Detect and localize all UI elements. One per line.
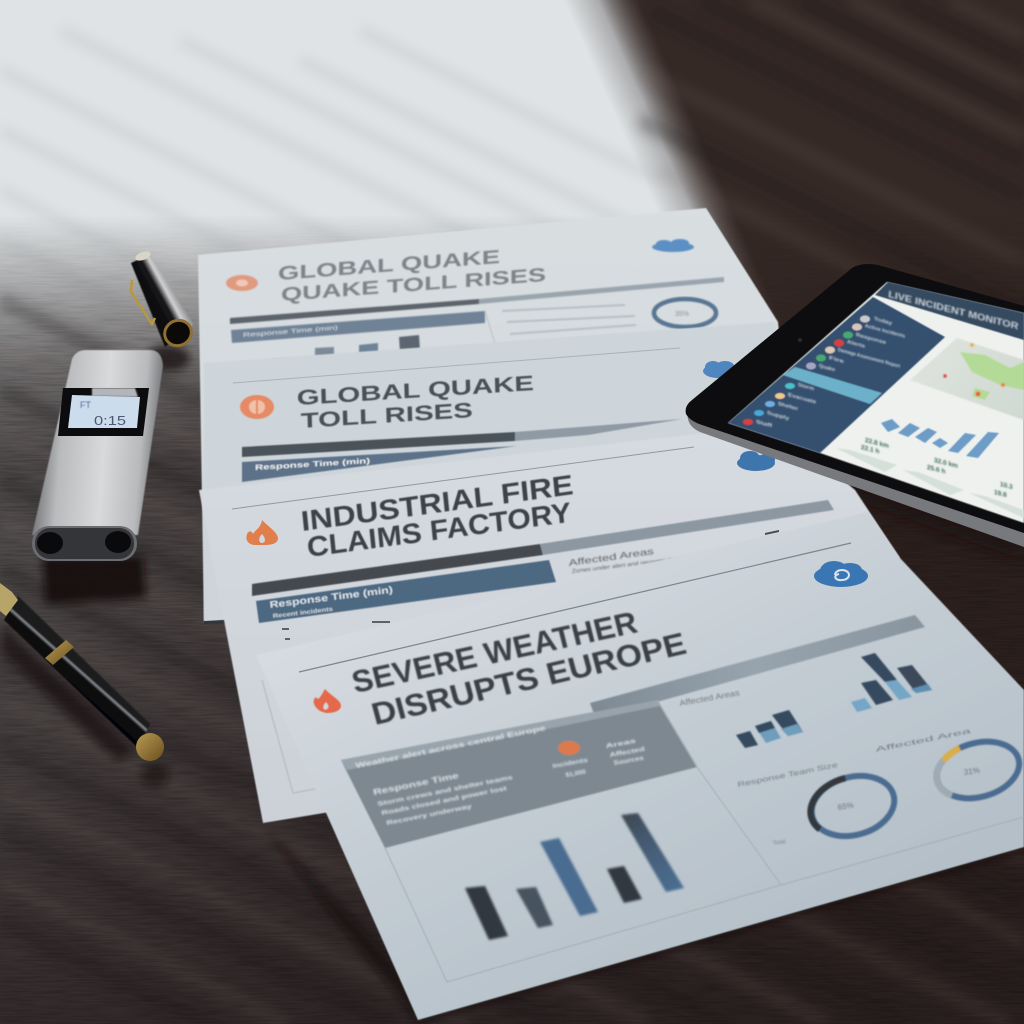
- sheet 1 donut: 35%: [675, 311, 689, 318]
- sheet 2 banner bars: Response Time (min): [255, 456, 371, 472]
- sheet 4 flame icon: [314, 689, 341, 713]
- sheet 3 affected areas caption: Affected Areas: [568, 546, 655, 568]
- summary panel text: Sources: [613, 755, 645, 767]
- tablet stat cards: 25.6 h: [927, 464, 945, 476]
- sheet 4 cloud icon: [814, 561, 868, 587]
- sheet 2 banner bars: [242, 419, 682, 482]
- sidebar labels: Quake: [819, 363, 835, 373]
- sheet 3 flame icon: [246, 520, 278, 545]
- summary panel text: Storm crews and shelter teams: [377, 774, 514, 808]
- fountain pen: [0, 583, 164, 761]
- sheet 3 banner bars: Recent incidents: [273, 607, 334, 620]
- summary panel text: Recovery underway: [386, 803, 473, 827]
- affected areas chart 1: [679, 688, 803, 748]
- summary panel alert icon: [558, 741, 580, 755]
- sidebar labels: [756, 316, 905, 429]
- faint streaks in the window glare: [0, 30, 660, 300]
- tablet screen: [728, 282, 1024, 523]
- tablet stat cards: 19.8: [994, 489, 1007, 499]
- summary panel text: [355, 724, 646, 827]
- fine wood grain: [0, 257, 1024, 1024]
- summary panel text: Weather alert across central Europe: [355, 724, 547, 770]
- sidebar labels: Shelter: [778, 401, 798, 412]
- donut chart right: [875, 727, 1024, 807]
- sheet 2 heading: TOLL RISES: [300, 399, 473, 433]
- sheet 3 affected areas caption: Zones under alert and recovery teams: [572, 555, 687, 575]
- sheet 1 heading: QUAKE TOLL RISES: [281, 265, 546, 306]
- pen cap: [131, 250, 198, 352]
- sheet 4 heading: DISRUPTS EUROPE: [368, 626, 690, 732]
- sheet 1 cloud icon: [652, 239, 694, 252]
- sheet 1 notes: [502, 305, 636, 344]
- donut chart left: Response Team Size: [737, 761, 838, 789]
- tablet body: [688, 265, 1024, 547]
- sheet 1 banner bars: Response Time (min): [243, 325, 338, 339]
- sidebar labels: Evacuate: [788, 392, 816, 406]
- sheet 2 quake icon: [240, 395, 274, 419]
- sidebar labels: Storm: [798, 382, 815, 392]
- report sheet 3: industrial fire: [199, 425, 900, 823]
- donut chart right: 31%: [963, 766, 980, 777]
- object shadows: [0, 345, 1024, 1022]
- affected areas chart 2: [851, 653, 932, 712]
- tablet map: [910, 338, 1024, 420]
- sheet 1 heading: [278, 247, 546, 306]
- sheet 1 heading: GLOBAL QUAKE: [278, 247, 500, 285]
- timer screen: 0:15: [94, 413, 126, 428]
- donut chart right: Affected Area: [875, 727, 971, 754]
- report sheet 2: global quake toll: [204, 322, 800, 620]
- sheet 3 banner bars: [252, 500, 834, 623]
- summary panel text: Incidents: [552, 757, 589, 770]
- tablet header: LIVE INCIDENT MONITOR: [888, 289, 1019, 332]
- sidebar labels: Active Incidents: [865, 323, 905, 340]
- timer screen: [58, 388, 149, 436]
- donut chart left: [737, 761, 901, 847]
- response time bar chart: [465, 813, 684, 940]
- tablet stat cards: 10.3: [1000, 481, 1013, 491]
- sheet 4 strip: [590, 615, 925, 719]
- tablet header: [875, 282, 1024, 340]
- sheet 2 heading: [296, 372, 534, 433]
- sheet 2 cloud icon: [703, 361, 734, 378]
- tablet camera: [798, 338, 802, 342]
- sidebar labels: Staff: [756, 419, 772, 429]
- sidebar labels: Today: [874, 316, 892, 327]
- report sheet 1: global quake: [198, 208, 790, 624]
- tablet stat cards: 22.1 h: [861, 444, 879, 456]
- summary panel text: Areas: [605, 737, 637, 750]
- sheet 4 chart frame: [385, 700, 1024, 982]
- sheet 2 heading: GLOBAL QUAKE: [296, 372, 534, 410]
- sheet 3 cloud icon: [737, 451, 775, 471]
- summary panel text: Roads closed and power lost: [381, 785, 507, 817]
- sheet 4 heading: [348, 605, 690, 732]
- sidebar labels: Response: [856, 332, 886, 346]
- sheet 3 heading: [299, 468, 575, 563]
- donut chart left: 65%: [837, 801, 854, 812]
- tablet sidebar: [728, 297, 945, 453]
- summary panel text: Response Time: [372, 771, 460, 797]
- sheet 3 banner bars: Response Time (min): [269, 585, 393, 611]
- report sheet 4: severe weather: [256, 512, 1024, 1020]
- tablet stat cards: 32.0 km: [934, 457, 958, 470]
- sidebar labels: Damage Assessment Report: [838, 347, 900, 370]
- sidebar icons: [743, 316, 870, 425]
- countdown timer device: [32, 350, 163, 561]
- sheet 4 heading: SEVERE WEATHER: [348, 605, 641, 700]
- sheet 1 bar chart: [273, 311, 496, 361]
- timer end holes: [37, 531, 131, 554]
- summary panel text: $1,000: [565, 768, 587, 779]
- sheet 1 quake icon: [226, 275, 258, 291]
- tablet stat cards: 22.8 km: [865, 437, 889, 450]
- affected areas chart 1: Affected Areas: [679, 688, 740, 708]
- summary panel text: Affected: [609, 746, 646, 759]
- sheet 3 heading: INDUSTRIAL FIRE: [299, 468, 575, 537]
- sheet 1 donut: [654, 299, 716, 327]
- sheet 4 summary panel: [341, 700, 697, 848]
- donut chart left: Total: [773, 839, 786, 847]
- tablet bar chart: [881, 419, 999, 458]
- sidebar labels: Fire: [829, 355, 844, 365]
- sheet 1 banner bars: [230, 277, 724, 343]
- tablet stat cards: [836, 437, 1024, 518]
- sheet 3 affected areas caption: [568, 546, 687, 575]
- timer screen: FT: [80, 400, 91, 410]
- sheet 3 heading: CLAIMS FACTORY: [305, 496, 573, 563]
- tablet dashboard: [686, 264, 1024, 547]
- sidebar labels: Alerts: [847, 339, 865, 350]
- sidebar labels: Supply: [767, 410, 789, 422]
